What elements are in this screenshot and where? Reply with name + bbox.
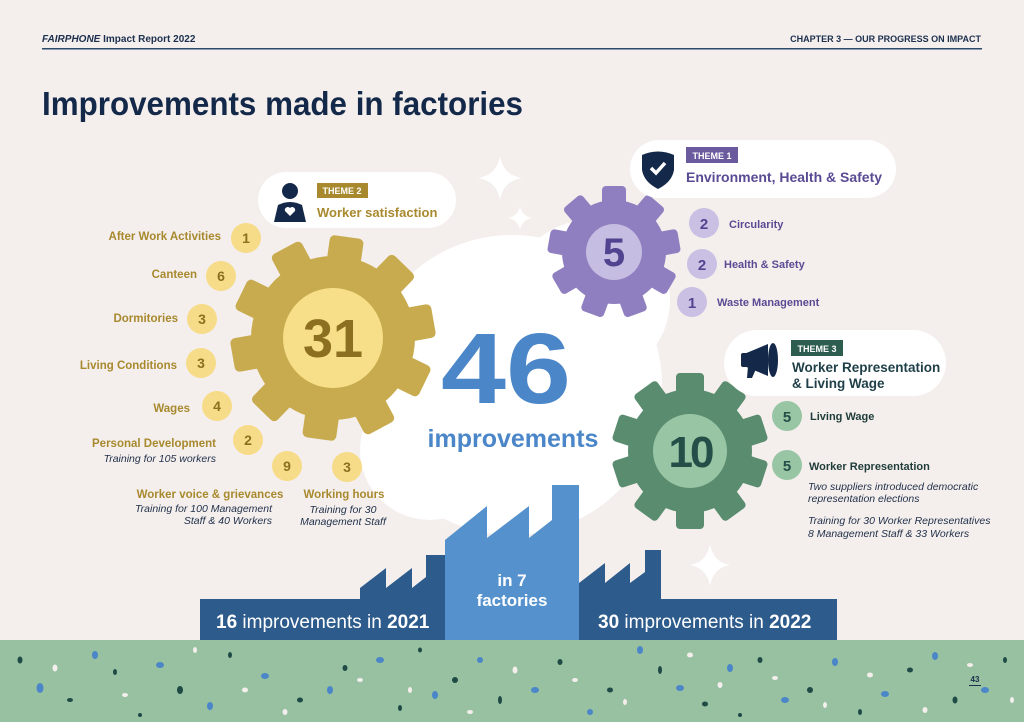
total 46 improvements: improvements (428, 425, 598, 453)
theme 2 items: Living Conditions (80, 360, 177, 372)
theme 3 pill: THEME 3 (797, 344, 837, 354)
theme 1 items: 1 (688, 295, 696, 312)
gear: theme 3 green 10 (611, 373, 769, 529)
factory: central building in 7 factories: factories (477, 591, 547, 610)
theme 2 items: Working hours (304, 489, 384, 501)
factory: central building in 7 factories (445, 485, 579, 640)
theme 2 items: 3 (198, 311, 206, 327)
theme 3 pill (724, 330, 946, 396)
header (42, 34, 982, 50)
theme 2 items: 2 (244, 432, 252, 448)
factory: left dark building with 2021 bar: 16 improvements in 2021 (216, 612, 430, 633)
total 46 improvements: 46 (441, 313, 571, 425)
theme 3 items: representation elections (808, 493, 920, 505)
theme 1 pill: THEME 1 (692, 151, 732, 161)
theme 2 items (80, 223, 387, 528)
theme 1 items: 2 (700, 216, 708, 233)
theme 2 items: Dormitories (113, 313, 178, 325)
title: Improvements made in factories (42, 85, 523, 122)
theme 2 items: 3 (343, 459, 351, 475)
theme 2 items: Training for 100 Management (135, 503, 273, 515)
theme 2 items: Wages (153, 403, 190, 415)
theme 1 items: Waste Management (717, 297, 820, 309)
icon: megaphone (741, 343, 778, 378)
sparkles (478, 156, 730, 586)
theme 2 items: 3 (197, 355, 205, 371)
gear: theme 1 purple 5: 5 (603, 231, 625, 275)
theme 3 items: Two suppliers introduced democratic (808, 481, 979, 493)
factory: right dark building with 2022 bar (579, 550, 837, 640)
icon: worker heart (274, 183, 306, 222)
total 46 improvements (428, 313, 598, 453)
theme 3 items: 5 (783, 409, 791, 426)
theme 2 pill: Worker satisfaction (317, 205, 437, 220)
theme 2 items: Training for 105 workers (104, 453, 217, 465)
theme 1 pill (630, 140, 896, 198)
gear: theme 1 purple 5 (547, 186, 681, 318)
theme 2 items: 6 (217, 268, 225, 284)
gear: theme 3 green 10: 10 (669, 428, 713, 477)
theme 2 items: 1 (242, 230, 250, 246)
gear: theme 2 gold 31: 31 (303, 309, 363, 369)
theme 3 items: 5 (783, 458, 791, 475)
icon: shield (642, 152, 674, 189)
theme 3 items: Worker Representation (809, 461, 930, 473)
theme 2 items: Training for 30 (310, 504, 377, 516)
theme 2 items: 4 (213, 398, 221, 414)
factory: left dark building with 2021 bar (200, 555, 445, 640)
factory: right dark building with 2022 bar: 30 improvements in 2022 (598, 612, 811, 633)
theme 3 pill: & Living Wage (792, 376, 885, 391)
theme 3 items: 8 Management Staff & 33 Workers (808, 528, 970, 540)
page number: 43 (971, 675, 980, 684)
gear: theme 2 gold 31 (230, 235, 436, 441)
theme 1 items (677, 208, 820, 317)
theme 2 items: 9 (283, 458, 291, 474)
theme 2 items: Worker voice & grievances (137, 489, 283, 501)
factory: central building in 7 factories: in 7 (497, 571, 527, 590)
theme 2 items: After Work Activities (109, 231, 221, 243)
theme 2 items: Personal Development (92, 438, 216, 450)
page number (969, 675, 981, 686)
theme 2 items: Management Staff (300, 516, 387, 528)
theme 1 items: Circularity (729, 219, 784, 231)
theme 1 pill: Environment, Health & Safety (686, 169, 882, 185)
theme 2 pill (258, 172, 456, 228)
ground with speckles (0, 640, 1024, 722)
header: CHAPTER 3 — OUR PROGRESS ON IMPACT (790, 34, 981, 44)
white cloud background (360, 220, 670, 535)
theme 1 items: Health & Safety (724, 259, 806, 271)
theme 1 items: 2 (698, 257, 706, 274)
theme 2 pill: THEME 2 (322, 186, 362, 196)
theme 2 items: Canteen (152, 269, 197, 281)
theme 3 items: Training for 30 Worker Representatives (808, 515, 991, 527)
theme 3 items (772, 401, 991, 540)
theme 3 items: Living Wage (810, 411, 874, 423)
theme 2 items: Staff & 40 Workers (184, 515, 273, 527)
theme 3 pill: Worker Representation (792, 360, 940, 375)
header: FAIRPHONE Impact Report 2022 (42, 34, 196, 45)
